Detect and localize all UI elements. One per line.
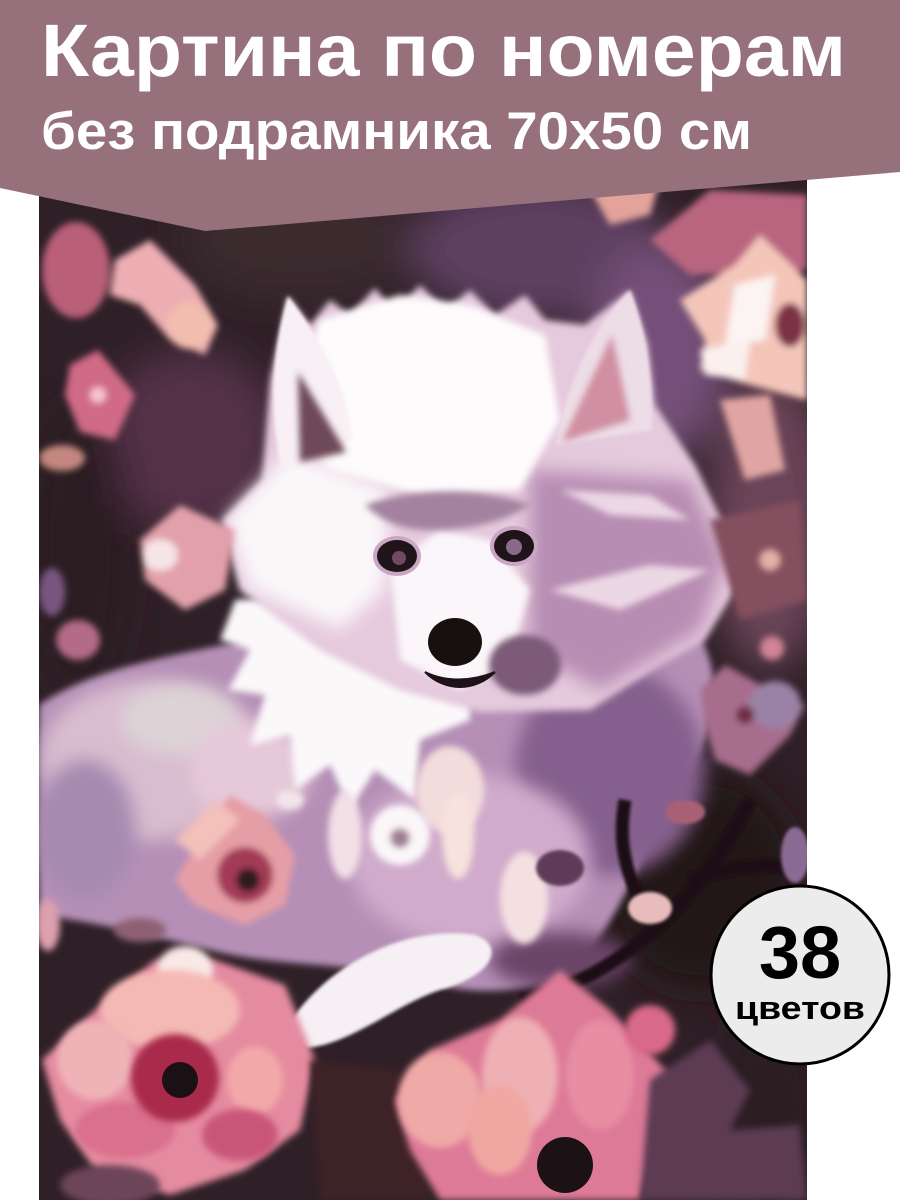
badge: 38 colours bbox=[711, 886, 889, 1064]
dog paw bbox=[288, 933, 492, 1048]
dog ears bbox=[273, 290, 652, 472]
dog chest fur bbox=[220, 590, 484, 834]
badge: 38 colours: цветов bbox=[735, 990, 865, 1026]
dog eyes bbox=[373, 526, 538, 576]
big flower bottom left bbox=[42, 946, 315, 1200]
flowers top right bbox=[590, 180, 807, 660]
flower right purple bbox=[700, 665, 805, 775]
badge: 38 colours: 38 bbox=[759, 911, 841, 994]
flower buds lower right bbox=[536, 800, 809, 924]
painting: white fluffy dog among pink flowers bbox=[30, 177, 830, 1200]
dog cheek fur streaks bbox=[550, 490, 710, 610]
subtitle: без подрамника 70х50 см bbox=[41, 102, 752, 161]
flower middle left bbox=[114, 795, 295, 942]
header banner bbox=[0, 0, 900, 231]
chest flower bbox=[276, 790, 548, 944]
dog nose and mouth bbox=[425, 618, 495, 687]
dog head bbox=[222, 285, 735, 712]
flowers top left bbox=[36, 222, 235, 951]
title: Картина по номерам bbox=[41, 9, 846, 92]
big flower bottom center bbox=[310, 970, 807, 1200]
branches lower right bbox=[520, 800, 800, 1000]
dog body bbox=[39, 638, 717, 996]
